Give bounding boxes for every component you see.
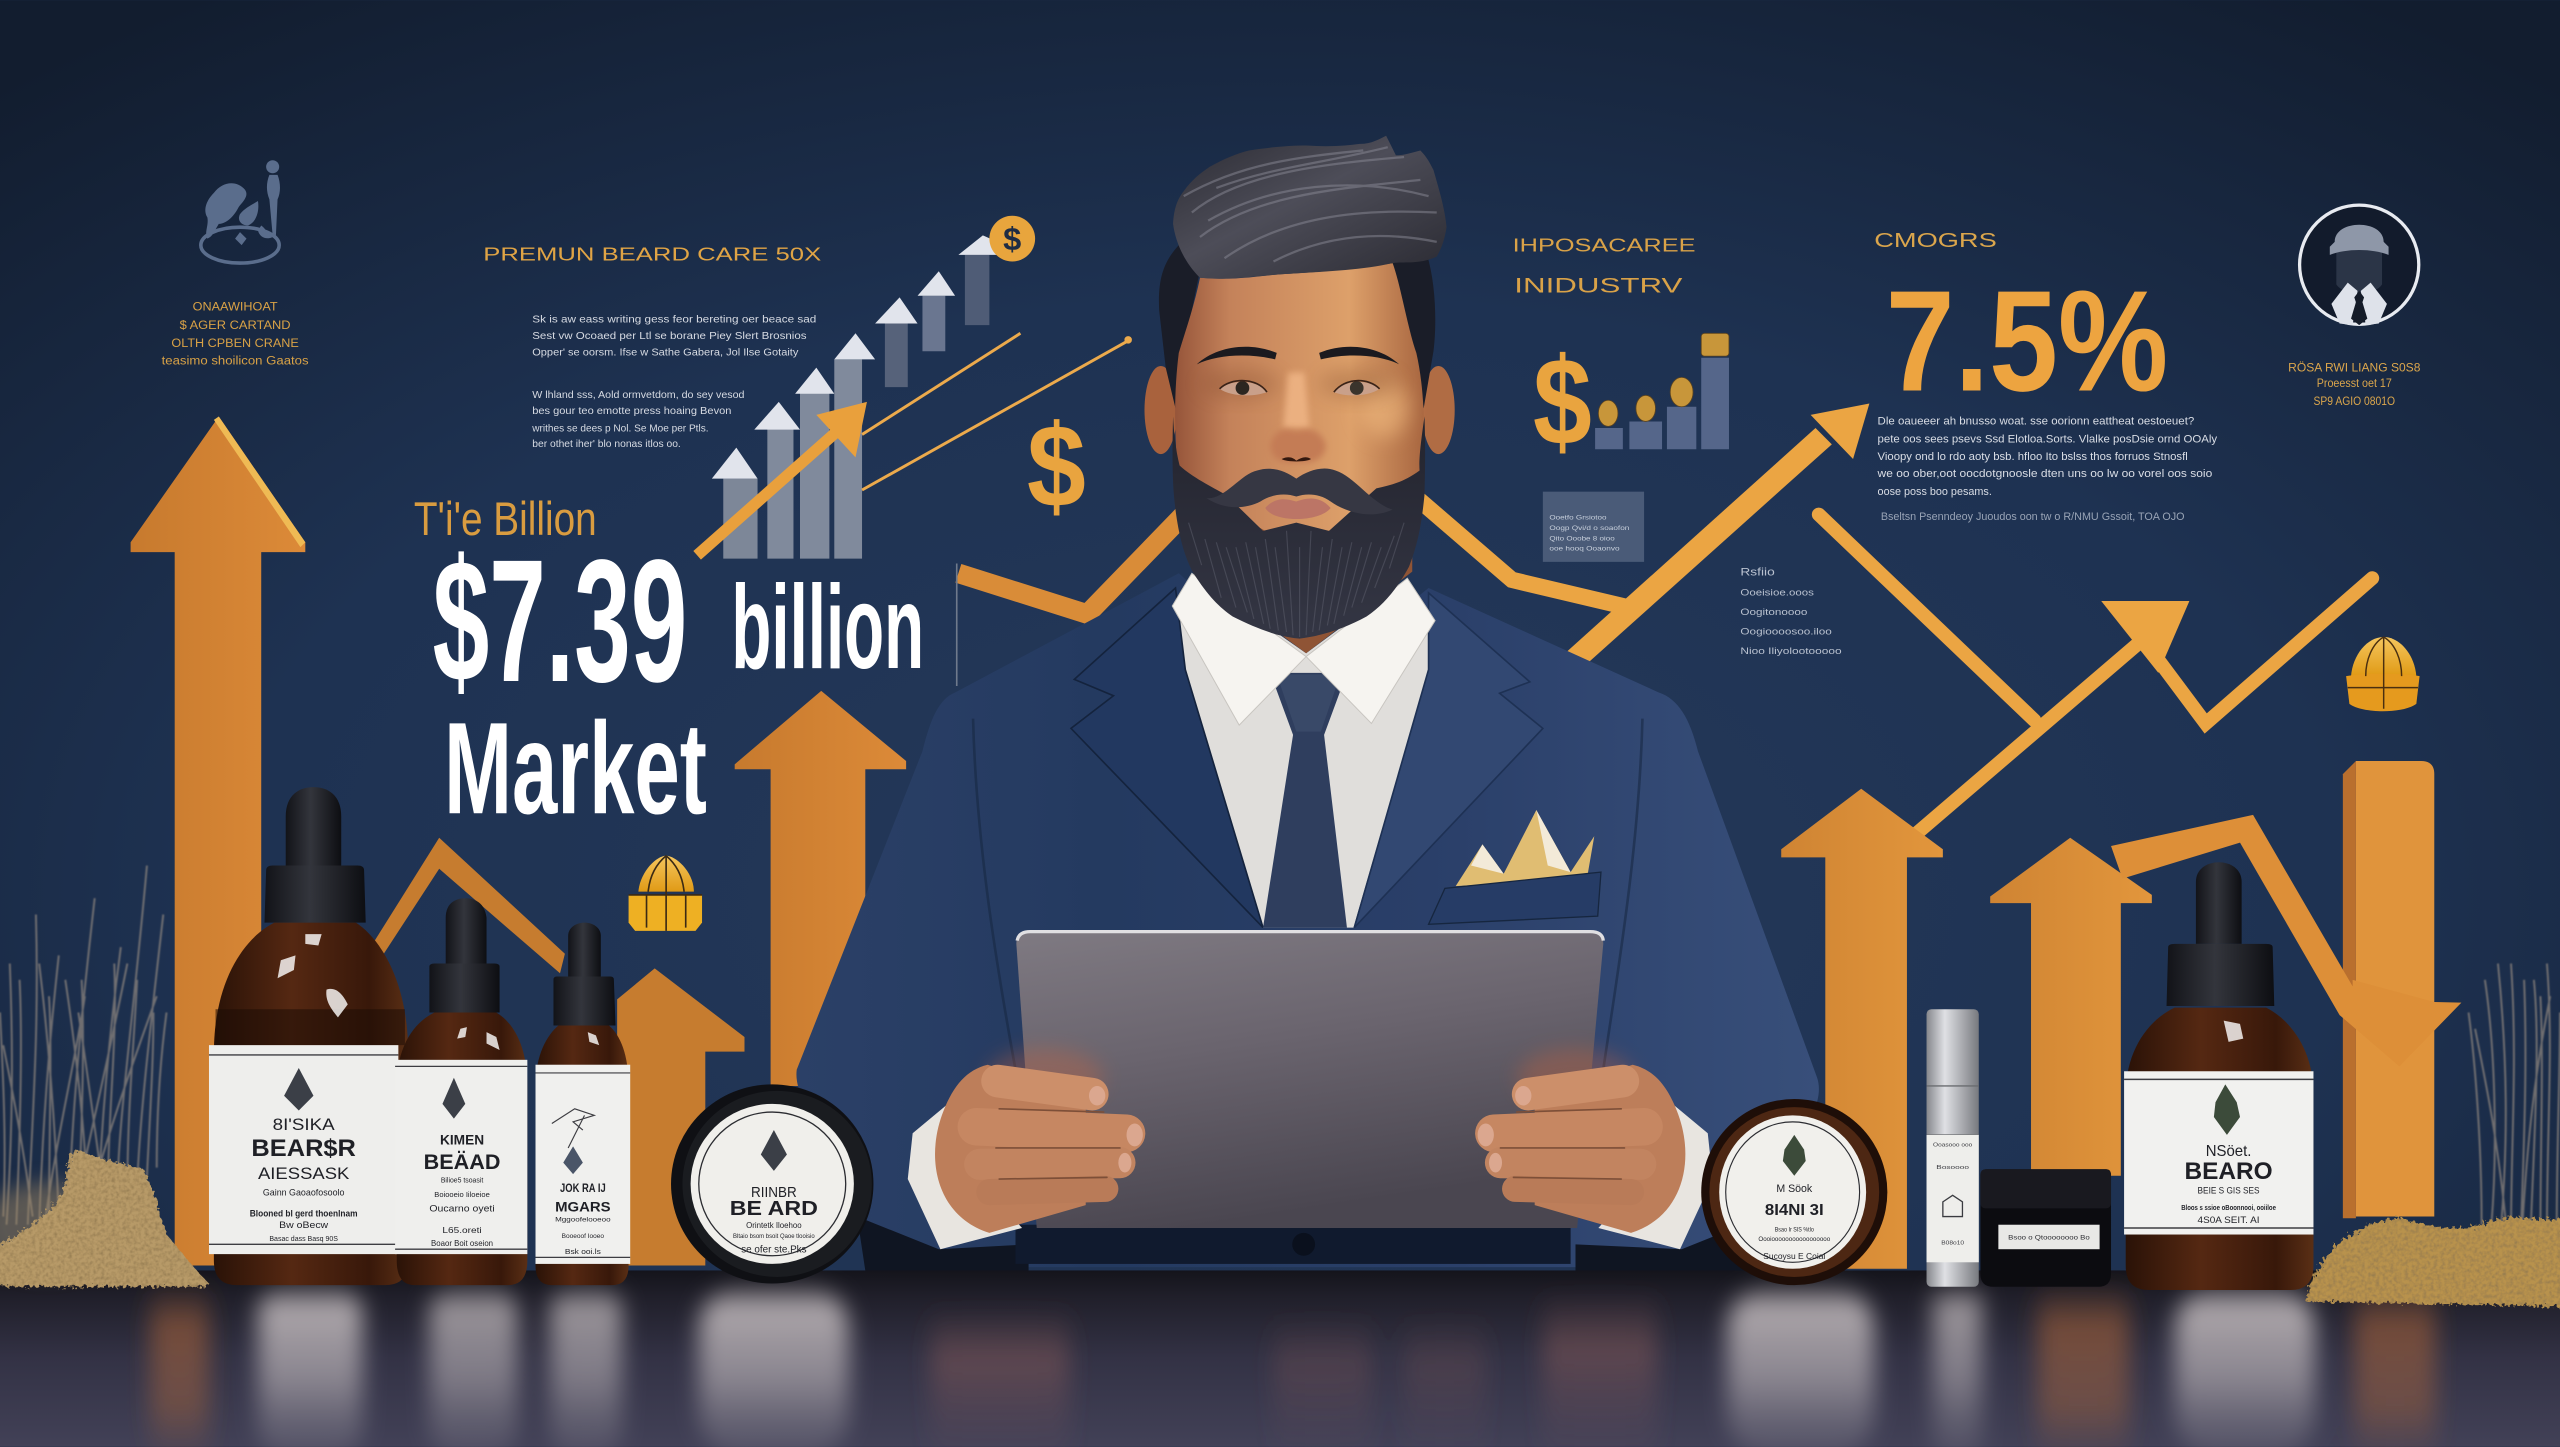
beard strands [1189, 523, 1404, 637]
icon: lamp right [2346, 637, 2420, 711]
text block: description left: Opper' se oorsm. Ifse w Sathe Gabera, Jol Ilse Gotaity [532, 347, 799, 358]
product: round jar right: Bsao Ir SIS %tlo [1775, 1226, 1814, 1233]
arrow: lower right zigzag arrow [1819, 515, 2372, 836]
product: round jar right: 8I4NI 3I [1765, 1202, 1824, 1219]
text block: description left [531, 315, 817, 450]
eye shadow right [1319, 369, 1398, 399]
nose [1270, 372, 1326, 463]
heading: industry block: INIDUSTRV [1514, 274, 1684, 297]
product: medium dropper bottle: L65.oreti [442, 1226, 482, 1235]
text block: description left: ber othet iher' blo nonas itlos oo. [532, 439, 681, 450]
icon: gold dollar coin: $ [1003, 220, 1021, 257]
decoration: left grass base [0, 1182, 111, 1274]
sleeve seams [973, 719, 1642, 1070]
decoration: left dried grass [0, 866, 167, 1225]
panel: small note box: Qito Ooobe 8 oioo [1549, 536, 1615, 543]
eye shadow [1202, 369, 1280, 399]
pocket [1429, 872, 1601, 924]
icon: large dollar sign: $ [1027, 400, 1086, 531]
product: medium dropper bottle: Boaor Boit oseion [431, 1239, 493, 1248]
heading: premium beard care: PREMUN BEARD CARE 50X [483, 244, 822, 265]
stat: 7.39 billion market: billion [731, 561, 924, 694]
left cuff [908, 1092, 1022, 1249]
text: small list: Ooeisioe.ooos [1740, 587, 1815, 597]
product: large dropper bottle left: BEAR$R [251, 1136, 356, 1162]
text: right caption [2288, 361, 2421, 408]
right hand [1494, 1065, 1685, 1233]
cheek highlight [1360, 379, 1409, 438]
product: round jar right [1701, 1099, 1887, 1285]
text: small list: Rsfiio [1740, 567, 1775, 579]
product: round jar left: Orintetk Iloehoo [746, 1221, 802, 1230]
chart: rising arrow bars [712, 235, 998, 559]
text: small list: Nioo Iliyolootooooo [1740, 646, 1842, 656]
text: right caption: SP9 AGIO 0801O [2313, 394, 2395, 408]
product: round jar left: RIINBR [751, 1185, 797, 1201]
text block: description left: writhes se dees p Nol. Se Moe per Ptls. [531, 423, 709, 434]
hand glow right [1517, 1048, 1634, 1107]
product: large bottle right: Bloos s ssioe oBoonnooi, ooiiloe [2181, 1203, 2276, 1212]
right cuff [1598, 1092, 1713, 1249]
product: silver tube: Ooasooo ooo [1933, 1142, 1973, 1148]
arrow: orange chart arrow and thin trend lines [697, 333, 1131, 555]
text block: description left: Sk is aw eass writing gess feor bereting oer beace sad [532, 315, 817, 326]
pocket square [1456, 810, 1594, 886]
product: medium dropper bottle: KIMEN [440, 1132, 484, 1148]
heading: CMOGRS: CMOGRS [1874, 229, 1997, 252]
hand glow left [986, 1048, 1104, 1107]
product: large dropper bottle left: Basac dass Basq 90S [269, 1234, 338, 1243]
left eye [1220, 381, 1267, 395]
left collar [1172, 573, 1306, 725]
icon: lamp left [629, 856, 702, 931]
product: large dropper bottle left: Blooned bl gerd thoenlnam [250, 1209, 358, 1219]
product: small dropper bottle [536, 923, 630, 1285]
neck [1200, 523, 1412, 653]
decoration: right dried grass [2469, 964, 2560, 1233]
text block: description left: Sest vw Ocoaed per Ltl se borane Piey Slert Brosnios [532, 331, 807, 342]
text block: description left: W lhland sss, Aold ormvetdom, do sey vesod [532, 390, 745, 401]
text block: description right: we oo ober,oot oocdotgnoosle dten uns oo lw oo vorel oos soio [1876, 468, 2212, 480]
tie [1263, 673, 1347, 928]
product: large dropper bottle left: Gainn Gaoaofosoolo [263, 1187, 345, 1197]
shirt [1172, 573, 1435, 928]
side hair [1159, 245, 1435, 408]
text: top-left caption: ONAAWIHOAT [193, 299, 278, 313]
product: round jar right: Oooiooooooooooooooooo [1758, 1236, 1831, 1243]
text: top-left caption: OLTH CPBEN CRANE [171, 336, 299, 350]
product: small dropper bottle: Booeoof Iooeo [562, 1233, 605, 1240]
text block: description right: oose poss boo pesams. [1878, 486, 1992, 498]
right lapel [1354, 593, 1543, 928]
floor with reflections [0, 1270, 2560, 1447]
panel: small note box: Ooetfo Grsiotoo [1549, 514, 1607, 521]
text: small list [1740, 567, 1842, 656]
face [1175, 263, 1424, 531]
product: round jar left [671, 1084, 873, 1284]
product: small dropper bottle: Bsk ooi.ls [565, 1247, 601, 1256]
product: silver tube: Bosoooo [1936, 1165, 1970, 1171]
left ear [1144, 366, 1177, 454]
right eye [1334, 381, 1380, 395]
right ear [1422, 366, 1455, 454]
product: large bottle right: BEIE S GIS SES [2198, 1186, 2260, 1196]
arrows: right lower orange arrows [1781, 761, 2461, 1269]
text block: description right: Bseltsn Psenndeoy Juoudos oon tw o R/NMU Gssoit, TOA OJO [1881, 511, 2185, 523]
stat: 7.5 percent: 7.5% [1886, 261, 2168, 421]
product: small dropper bottle: JOK RA IJ [560, 1182, 606, 1195]
chart line: orange trend behind man [957, 498, 1636, 686]
product: silver tube [1927, 1009, 1979, 1287]
text: top-left caption: $ AGER CARTAND [180, 318, 291, 332]
right eyebrow [1319, 347, 1399, 364]
chart: dollar with bars and gold piles [1533, 333, 1729, 471]
text: top-left caption [162, 299, 309, 367]
suit jacket [796, 573, 1819, 1267]
chart: dollar with bars and gold piles: $ [1533, 333, 1592, 471]
arrow: small orange arrow [617, 968, 744, 1266]
product: small dropper bottle: MGARS [555, 1199, 611, 1215]
moustache [1207, 468, 1393, 514]
product: medium dropper bottle: Oucarno oyeti [429, 1204, 495, 1214]
product: round jar right: Sucoysu E Coial [1763, 1252, 1825, 1261]
icon: gold dollar coin [989, 216, 1035, 261]
product: large bottle right: NSöet. [2206, 1143, 2251, 1160]
left eyebrow [1197, 347, 1277, 364]
finger nails [1089, 1086, 1531, 1172]
lips [1265, 499, 1331, 519]
product: large dropper bottle left: 8I'SIKA [273, 1116, 335, 1134]
product: black jar: Bsoo o Qtoooooooo Bo [2008, 1234, 2090, 1241]
button [1292, 1233, 1315, 1256]
product: medium dropper bottle: BEÄAD [424, 1150, 500, 1174]
jacket lower band [1016, 1225, 1571, 1264]
text: small list: Oogioooosoo.iloo [1740, 627, 1832, 637]
left hand [935, 1065, 1127, 1233]
icon: top-left emblem [201, 160, 280, 263]
tie knot highlight [1277, 675, 1340, 732]
tablet [1016, 931, 1603, 1228]
product: round jar left: Bltaio bsom bsoit Qaoe tlooisio [733, 1233, 815, 1240]
heading: industry block: IHPOSACAREE [1513, 235, 1696, 256]
text: right caption: RÖSA RWI LIANG S0S8 [2288, 361, 2421, 375]
product: small dropper bottle: Mggoofelooeoo [555, 1216, 611, 1223]
text block: description right: Dle oaueeer ah bnusso woat. sse oorionn eattheat oestoeuet? [1878, 416, 2194, 428]
product: silver tube: B08o10 [1941, 1240, 1965, 1246]
arrow: middle orange arrow [735, 691, 906, 1086]
product: large bottle right: BEARO [2184, 1159, 2273, 1185]
heading: industry block [1513, 235, 1696, 297]
arrow: large left orange arrow [131, 417, 305, 1266]
product: black jar [1980, 1169, 2111, 1287]
text block: description right: Vioopy ond lo rdo aoty bsb. hfloo Ito bslss thos forruos Stnosfl [1878, 451, 2188, 463]
product: round jar right: M Söok [1776, 1183, 1813, 1195]
product: large dropper bottle left [209, 787, 408, 1285]
stat: 7.39 billion market [433, 524, 924, 841]
product: round jar left: BE ARD [730, 1198, 818, 1220]
beard [1173, 417, 1425, 639]
figure: businessman [796, 136, 1819, 1270]
panel: small note box: ooe hooq Ooaonvo [1549, 545, 1620, 552]
hair strands [1184, 147, 1437, 261]
text: right caption: Proeesst oet 17 [2317, 376, 2392, 390]
text block: description right [1876, 416, 2217, 523]
panel: small note box: Oogp Qvi/d o soaofon [1549, 525, 1630, 532]
product: large bottle right [2124, 862, 2313, 1290]
right collar [1306, 578, 1435, 724]
hair [1173, 136, 1447, 279]
product: medium dropper bottle: Boiooeio Iiloeioe [434, 1192, 490, 1199]
pocket square highlight [1471, 810, 1571, 874]
text block: description right: pete oos sees psevs Ssd Elotloa.Sorts. Vlalke posDsie ornd OOAly [1878, 434, 2217, 446]
product: large bottle right: 4S0A SEIT. AI [2198, 1215, 2260, 1225]
arrow: right ascending arrow [1556, 404, 1869, 670]
decoration: left moss pile [0, 1150, 209, 1287]
stat: 7.39 billion market: Market [444, 695, 707, 841]
product: large dropper bottle left: Bw oBecw [279, 1220, 329, 1230]
heading: the billion: T'i'e Billion [414, 493, 597, 546]
decoration: right moss pile [2305, 1217, 2560, 1306]
icon: man in circle [2300, 205, 2419, 325]
product: medium dropper bottle [395, 898, 527, 1285]
arrow: orange chevron behind bottles [362, 838, 565, 986]
text: small list: Oogitonoooo [1740, 607, 1807, 617]
stat: 7.39 billion market: $7.39 [433, 524, 687, 719]
product: round jar left: se ofer ste.Pks [741, 1244, 807, 1255]
product: medium dropper bottle: Bilioe5 tsoasit [441, 1177, 483, 1184]
product: large dropper bottle left: AIESSASK [258, 1165, 350, 1183]
left lapel [1071, 588, 1263, 928]
text: top-left caption: teasimo shoilicon Gaatos [162, 354, 309, 367]
text block: description left: bes gour teo emotte press hoaing Bevon [532, 406, 732, 417]
panel: small note box [1543, 492, 1644, 562]
lower sleeve shadows [857, 1217, 1763, 1270]
